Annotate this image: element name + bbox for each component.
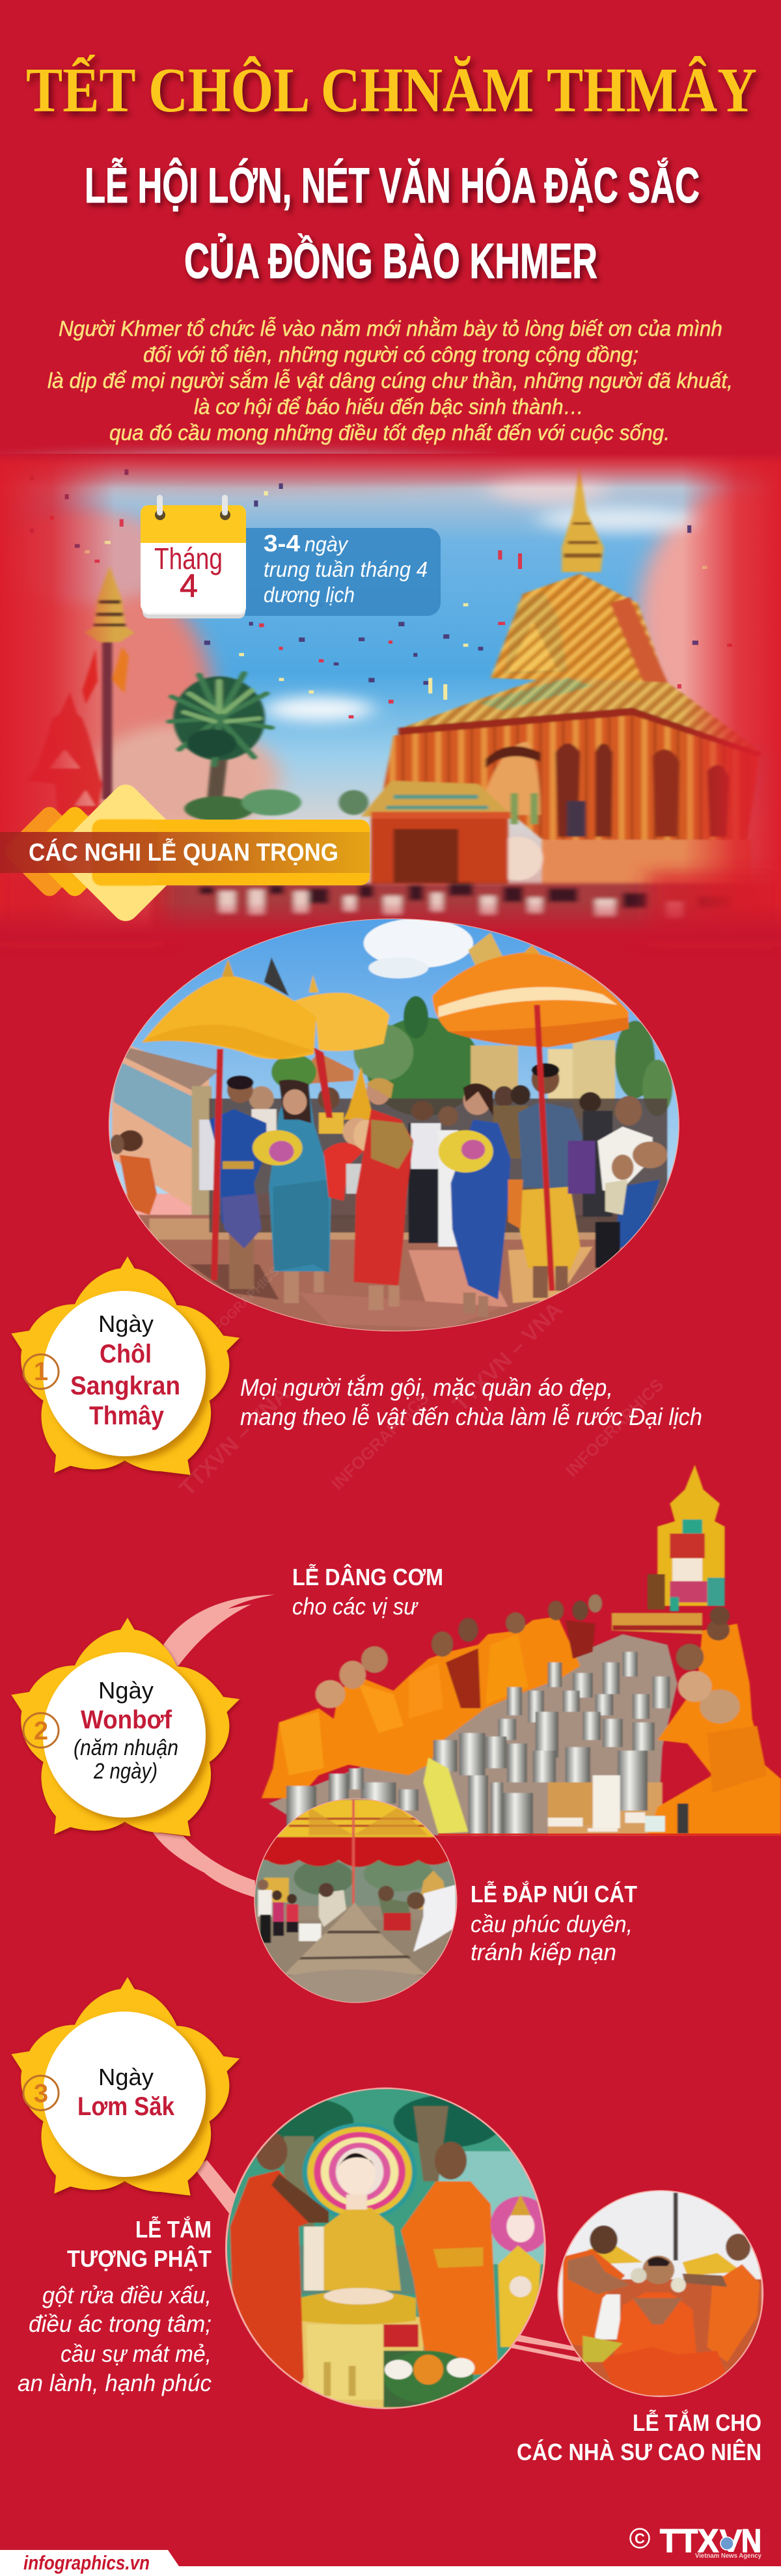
watermarks: TTXVN – VNA	[448, 1297, 568, 1417]
right monk	[707, 2264, 760, 2362]
day 1 badge: Sangkran	[70, 1372, 180, 1400]
photo: procession with parasols	[100, 911, 697, 1335]
day 1 description: mang theo lễ vật đến chùa làm lễ rước Đại lịch	[240, 1404, 702, 1430]
ground	[138, 1214, 623, 1331]
duration text: trung tuần tháng 4	[264, 557, 428, 581]
watermarks: INFOGRAPHICS	[327, 1388, 433, 1493]
watermarks: INFOGRAPHICS	[202, 1264, 282, 1345]
label: bathing Buddha: TƯỢNG PHẬT	[67, 2245, 212, 2272]
TTXVN logo	[630, 2523, 761, 2560]
subtitle	[85, 158, 700, 289]
arrow: to sand mountain	[152, 1832, 255, 1898]
intro paragraph: là cơ hội để báo hiếu đến bậc sinh thành…	[194, 395, 584, 419]
Buddha	[323, 2208, 401, 2291]
duration text: dương lịch	[264, 583, 355, 607]
TTXVN logo: Vietnam News Agency	[695, 2553, 761, 2560]
right elder and kid	[597, 1127, 653, 1194]
woman in teal	[269, 1087, 331, 1271]
day 1 badge: 1	[34, 1357, 48, 1386]
watermarks: INFOGRAPHICS	[562, 1375, 667, 1480]
monk left	[230, 2170, 319, 2403]
photo: bathing the Buddha statue	[219, 2083, 558, 2415]
footer bar	[0, 2550, 781, 2576]
day 3 badge: 3	[34, 2079, 48, 2108]
robes below	[600, 2347, 727, 2396]
duration box	[234, 528, 441, 616]
label: bathing Buddha: LỄ TẮM	[135, 2215, 212, 2243]
label: rice offering	[292, 1563, 443, 1620]
duration text: 3-4	[264, 530, 300, 557]
pillars	[471, 1046, 518, 1091]
arrow: to rice offering	[163, 1594, 275, 1668]
day 3 badge: Ngày	[98, 2064, 154, 2090]
duration text	[264, 530, 428, 607]
confetti	[30, 469, 698, 685]
duration text: ngày	[305, 533, 349, 556]
arrow: to Buddha bathing	[194, 2160, 236, 2213]
day 2 badge: Ngày	[98, 1677, 154, 1704]
man in blue	[229, 1229, 254, 1289]
hero vignette	[0, 454, 115, 942]
orange and yellow parasols	[314, 1047, 333, 1118]
intro paragraph	[48, 316, 733, 445]
day 1 badge	[11, 1256, 240, 1475]
label: sand mountain	[471, 1880, 637, 1965]
flowers	[383, 2351, 473, 2403]
TTXVN logo: N	[741, 2523, 761, 2559]
label: bathing Buddha: an lành, hạnh phúc	[18, 2370, 212, 2396]
lower wall and pavilion	[542, 840, 751, 893]
label: sand mountain: tránh kiếp nạn	[471, 1939, 616, 1965]
people	[258, 1890, 272, 1917]
label: bathing Buddha: gột rửa điều xấu,	[42, 2282, 212, 2308]
day 2 badge: (năm nhuận	[74, 1736, 178, 1760]
intro paragraph: Người Khmer tổ chức lễ vào năm mới nhằm bày tỏ lòng biết ơn của mình	[59, 316, 722, 340]
day 1 description: Mọi người tắm gội, mặc quần áo đẹp,	[240, 1374, 613, 1401]
subtitle: CỦA ĐỒNG BÀO KHMER	[184, 234, 597, 289]
monk right	[401, 2181, 498, 2377]
palanquin	[657, 1465, 725, 1606]
photo: sand mountain circle	[249, 1797, 463, 2012]
bowls	[631, 2268, 646, 2283]
palm tree	[205, 753, 228, 818]
woman in red	[353, 1109, 413, 1286]
calendar icon: month 4: 4	[180, 568, 198, 604]
watermarks	[175, 1264, 667, 1501]
day 3 badge	[11, 1977, 240, 2196]
temple spire	[562, 466, 604, 572]
gable	[491, 574, 668, 686]
left monks	[262, 1616, 581, 1798]
arrow: to elder monks bathing	[509, 2334, 581, 2362]
photo: bathing elder monks	[553, 2189, 772, 2400]
label: bathing Buddha: điều ác trong tâm;	[29, 2310, 212, 2337]
label: sand mountain: cầu phúc duyên,	[471, 1911, 633, 1937]
section banner: CÁC NGHI LỄ QUAN TRỌNG	[29, 838, 338, 866]
day 1 badge: Chôl	[100, 1340, 152, 1368]
day 2 badge	[11, 1618, 240, 1836]
right monks	[648, 1624, 781, 1835]
temple wall	[379, 715, 760, 840]
TTXVN logo: TTX	[660, 2523, 719, 2559]
label: bathing Buddha: cầu sự mát mẻ,	[61, 2340, 212, 2367]
section banner	[0, 779, 370, 926]
TTXVN logo: C	[635, 2530, 645, 2547]
intro paragraph: đối với tổ tiên, những người có công trong cộng đồng;	[143, 342, 638, 367]
footer bar: infographics.vn	[23, 2551, 150, 2574]
day 1 badge: Ngày	[98, 1310, 154, 1337]
label: bathing elder monks: LỄ TẮM CHO	[633, 2409, 761, 2436]
label: bathing elder monks	[517, 2409, 761, 2465]
photo: monks with rice offerings	[262, 1465, 781, 1835]
container table base	[269, 1634, 678, 1835]
calendar icon: month 4	[141, 495, 441, 618]
man with pole	[518, 1102, 582, 1190]
TTXVN logo: V	[719, 2523, 743, 2559]
golden crown statue	[343, 1066, 372, 1120]
hero image: Khmer temple under a confetti sky	[0, 454, 781, 942]
left red stupa	[27, 692, 102, 815]
day 2 badge: Wonbơf	[81, 1706, 172, 1734]
intro paragraph: là dịp để mọi người sắm lễ vật dâng cúng chư thần, những người đã khuất,	[48, 368, 733, 393]
bushes	[184, 796, 254, 821]
label: rice offering: cho các vị sư	[292, 1593, 418, 1620]
day 1 description	[240, 1374, 702, 1430]
boys at left	[118, 1130, 143, 1152]
back crowd	[209, 1098, 668, 1232]
intro paragraph: qua đó cầu mong những điều tốt đẹp nhất đến với cuộc sống.	[109, 421, 670, 445]
throne and flowers	[294, 2317, 424, 2415]
sand pyramid	[284, 1902, 426, 1974]
halo	[303, 2123, 417, 2221]
small Buddha	[491, 2196, 551, 2253]
day 3 badge: Lơm Săk	[77, 2092, 175, 2121]
building	[112, 1038, 209, 1219]
day 1 badge: Thmây	[89, 1402, 165, 1430]
crowd	[150, 883, 777, 936]
left monk	[563, 2249, 625, 2347]
woman in blue	[451, 1120, 510, 1299]
day 2 badge: 2 ngày)	[93, 1759, 158, 1784]
flag pole	[102, 637, 112, 799]
center monk	[612, 2292, 697, 2362]
label: rice offering: LỄ DÂNG CƠM	[292, 1563, 443, 1590]
label: sand mountain: LỄ ĐẮP NÚI CÁT	[471, 1880, 637, 1907]
calendar icon: month 4: Tháng	[154, 542, 223, 575]
lower roof	[398, 676, 762, 753]
watermarks: TTXVN – VNA	[175, 1381, 294, 1501]
label: bathing Buddha	[18, 2215, 212, 2396]
label: bathing elder monks: CÁC NHÀ SƯ CAO NIÊN	[517, 2438, 761, 2465]
day 2 badge: 2	[34, 1717, 48, 1745]
tiffin carriers	[286, 1652, 670, 1835]
